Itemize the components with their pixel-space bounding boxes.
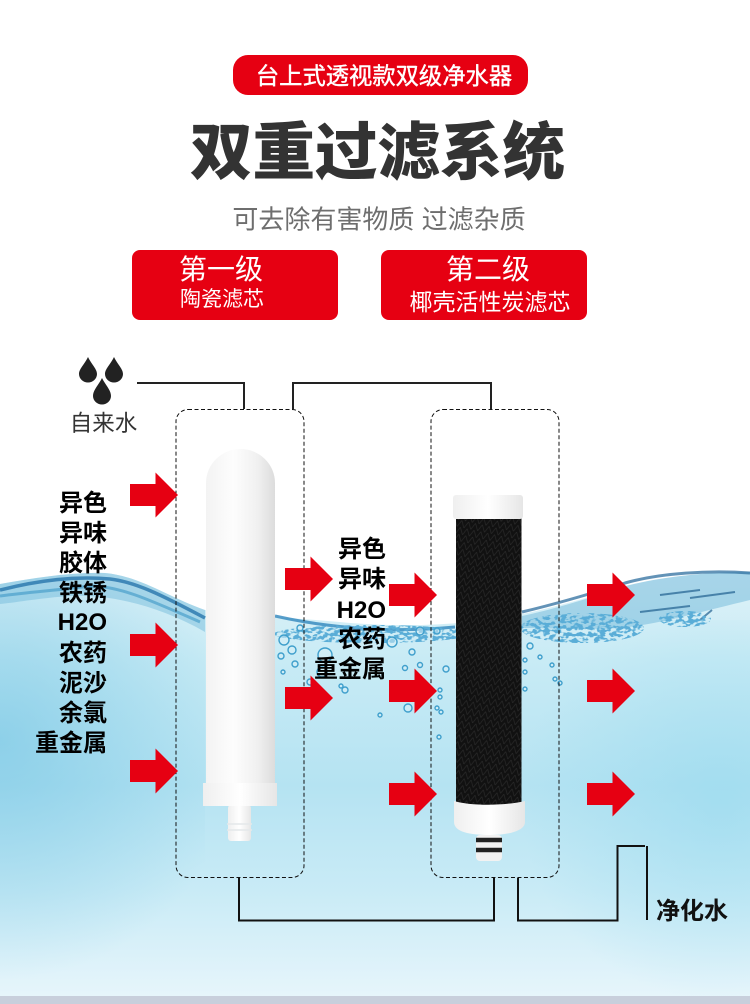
bottom pipe between filters bbox=[239, 878, 494, 920]
panel: stage two label: 第二级 bbox=[446, 254, 530, 285]
contaminants list: middle: 异色 bbox=[338, 536, 386, 563]
contaminants list: middle: 异味 bbox=[338, 566, 386, 593]
panel: stage two label: 椰壳活性炭滤芯 bbox=[410, 289, 570, 315]
second filter dashed box bbox=[431, 410, 559, 878]
panel: stage one label: 陶瓷滤芯 bbox=[180, 288, 264, 311]
contaminants list: middle: 农药 bbox=[338, 626, 386, 653]
panel: stage one label: 第一级 bbox=[179, 254, 263, 285]
connecting pipe between filters bbox=[293, 383, 491, 409]
subtitle: 可去除有害物质 过滤杂质 bbox=[232, 204, 526, 234]
contaminants list: left: 农药 bbox=[59, 640, 107, 667]
contaminants list: middle: 重金属 bbox=[314, 655, 386, 683]
inlet pipe bbox=[137, 383, 244, 409]
title: 双重过滤系统 bbox=[190, 118, 565, 188]
panel: stage two label bbox=[381, 250, 587, 320]
arrows: into first filter bbox=[130, 472, 178, 794]
top label pill bbox=[233, 55, 528, 95]
contaminants list: left bbox=[35, 490, 107, 757]
contaminants list: middle bbox=[314, 536, 386, 683]
purified water outlet pipe bbox=[518, 846, 647, 920]
contaminants list: left: 胶体 bbox=[59, 550, 107, 577]
contaminants list: left: 泥沙 bbox=[59, 670, 107, 697]
contaminants list: left: 异味 bbox=[59, 520, 107, 547]
contaminants list: left: 铁锈 bbox=[59, 580, 107, 607]
top label pill: 台上式透视款双级净水器 bbox=[256, 63, 512, 89]
contaminants list: left: 余氯 bbox=[59, 699, 107, 727]
tap water label: 自来水 bbox=[70, 411, 137, 436]
activated carbon filter bbox=[453, 495, 525, 861]
contaminants list: left: 重金属 bbox=[35, 729, 107, 757]
water bubbles bbox=[278, 625, 562, 739]
arrows: into second filter bbox=[389, 572, 437, 816]
contaminants list: left: 异色 bbox=[59, 490, 107, 517]
bottom strip bbox=[0, 996, 750, 1004]
panel: stage one label bbox=[132, 250, 338, 320]
purified water label: 净化水 bbox=[656, 898, 728, 925]
icon: tap water drops bbox=[79, 357, 123, 404]
water background bbox=[0, 572, 750, 996]
contaminants list: left: H2O bbox=[58, 609, 107, 636]
arrows: out of second filter bbox=[587, 572, 635, 816]
arrows: out of first filter bbox=[285, 556, 333, 720]
ceramic filter bbox=[203, 449, 277, 841]
first filter dashed box bbox=[176, 410, 304, 878]
contaminants list: middle: H2O bbox=[337, 597, 386, 624]
